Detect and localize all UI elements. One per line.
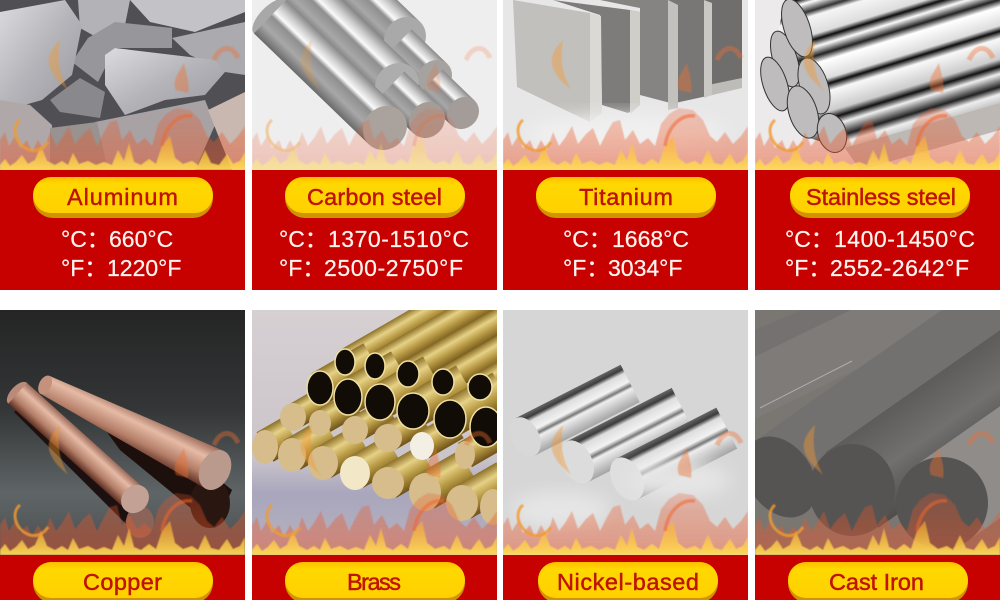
name pill: Brass	[285, 562, 465, 600]
panel: aluminum	[0, 0, 245, 290]
temperature values: 1400-1450°C	[834, 226, 975, 252]
temperature values: 660°C	[109, 226, 173, 252]
temperature values	[61, 226, 181, 281]
red info card	[252, 555, 497, 600]
name pill: Nickel-based	[538, 562, 718, 600]
panel: titanium	[503, 0, 748, 290]
name pill: Copper	[33, 562, 213, 600]
red info card	[503, 170, 748, 290]
rod ends	[252, 403, 506, 525]
name pill: Titanium	[536, 177, 716, 218]
panel: nickel-based	[503, 310, 748, 600]
photo: cast iron bars with flames	[755, 310, 1000, 555]
name pill: Carbon steel: Carbon steel	[307, 184, 442, 210]
name pill: Nickel-based: Nickel-based	[557, 569, 699, 595]
temperature values: 3034°F	[608, 255, 682, 281]
temperature values: 1668°C	[612, 226, 689, 252]
red info card	[252, 170, 497, 290]
temperature values	[279, 226, 469, 281]
name pill: Stainless steel: Stainless steel	[806, 184, 956, 210]
name pill: Titanium: Titanium	[579, 184, 673, 210]
temperature values: °F：	[563, 255, 609, 281]
name pill: Aluminum: Aluminum	[67, 184, 178, 210]
photo: carbon steel bars with flames	[247, 0, 497, 170]
red info card	[755, 555, 1000, 600]
red info card	[0, 555, 245, 600]
temperature values: 2552-2642°F	[830, 255, 969, 281]
photo: nickel-based rods with smoke and flames	[503, 310, 748, 555]
temperature values: 1220°F	[107, 255, 181, 281]
name pill: Carbon steel	[285, 177, 465, 218]
name pill: Brass: Brass	[347, 569, 401, 595]
temperature values	[563, 226, 689, 281]
photo: stainless steel rods with flames	[755, 0, 1000, 170]
red info card	[0, 170, 245, 290]
photo: copper rods with flames	[0, 310, 245, 555]
panel: brass	[252, 310, 497, 600]
photo: brass tubes and rods with flames	[252, 310, 497, 555]
photo: aluminum ingots with flames	[0, 0, 245, 170]
name pill: Cast Iron	[788, 562, 968, 600]
temperature values: 2500-2750°F	[324, 255, 463, 281]
panel: cast iron	[755, 310, 1000, 600]
name pill: Stainless steel	[790, 177, 970, 218]
temperature values: °C：	[279, 226, 328, 252]
name pill: Aluminum	[33, 177, 213, 218]
name pill: Copper: Copper	[83, 569, 162, 595]
tube openings	[307, 349, 502, 447]
photo: titanium plates with flames	[503, 0, 748, 170]
panel: copper	[0, 310, 245, 600]
temperature values: °F：	[61, 255, 107, 281]
temperature values: °C：	[61, 226, 110, 252]
temperature values: °C：	[785, 226, 834, 252]
temperature values: 1370-1510°C	[328, 226, 469, 252]
temperature values: °C：	[563, 226, 612, 252]
temperature values: °F：	[785, 255, 831, 281]
panel: stainless steel	[755, 0, 1000, 290]
brass tube bodies	[256, 310, 497, 519]
temperature values	[785, 226, 975, 281]
red info card	[755, 170, 1000, 290]
red info card	[503, 555, 748, 600]
name pill: Cast Iron: Cast Iron	[829, 569, 924, 595]
panel: carbon steel	[247, 0, 497, 290]
temperature values: °F：	[279, 255, 325, 281]
